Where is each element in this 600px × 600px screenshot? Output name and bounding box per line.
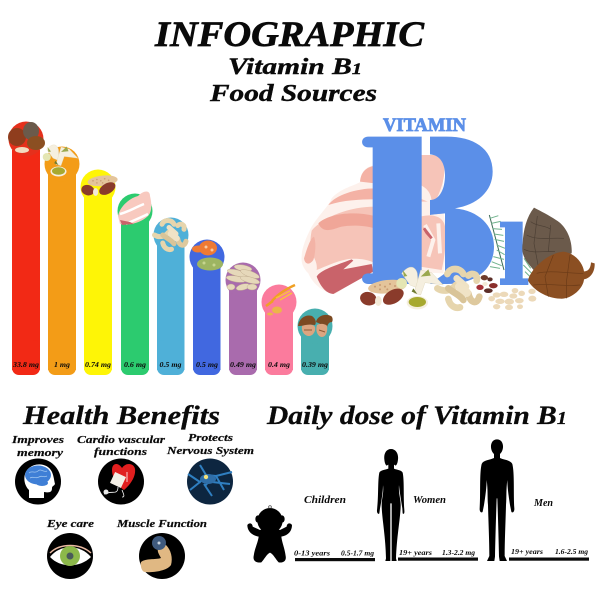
benefit: protects nervous system <box>166 432 255 504</box>
dose: women: 19+ years <box>399 549 432 557</box>
dose: women: Women <box>413 495 446 506</box>
pale seeds <box>488 288 536 310</box>
dose: men: 1.6-2.5 mg <box>555 548 589 556</box>
dose: women: 1.3-2.2 mg <box>442 549 476 557</box>
benefit: eye care: Eye care <box>46 518 94 530</box>
bar: 0.5 mg lentils <box>190 240 224 375</box>
bar: 0.4 mg <box>262 284 296 375</box>
bar: 0.74 mg: 0.74 mg <box>85 360 111 369</box>
subscript 1 <box>500 222 528 285</box>
benefit: cardio vascular functions: functions <box>94 446 147 458</box>
silhouette: man <box>480 439 514 561</box>
bar: 0.5 mg cashews: 0.5 mg <box>160 360 182 369</box>
heading: Health Benefits: Health Benefits <box>22 401 220 430</box>
bar: 0.74 mg <box>80 170 118 375</box>
letter B <box>362 137 494 284</box>
dose: men <box>480 439 589 561</box>
title <box>154 14 425 107</box>
bar: 1 mg: 1 mg <box>54 360 70 369</box>
bar: 33.8 mg: 33.8 mg <box>12 360 39 369</box>
dose: children: 0.5-1.7 mg <box>341 550 375 558</box>
bar: 0.6 mg: 0.6 mg <box>124 360 146 369</box>
dose: children: 0-13 years <box>294 550 330 558</box>
illustration: vitamin B1 with foods <box>302 137 595 310</box>
benefit: muscle function: Muscle Function <box>116 518 207 530</box>
bar: 0.39 mg: 0.39 mg <box>302 360 328 369</box>
title: INFOGRAPHIC <box>154 14 425 54</box>
meat <box>302 155 446 294</box>
benefit: protects nervous system: Protects <box>188 432 233 444</box>
title: Vitamin B 1 <box>228 54 362 79</box>
label: VITAMIN: VITAMIN <box>383 115 466 136</box>
title: Food Sources <box>209 81 377 107</box>
pistachios <box>396 267 443 309</box>
benefit: improves memory: memory <box>17 447 63 459</box>
benefit: eye care <box>46 518 94 579</box>
pine cone: brown <box>528 252 595 299</box>
bar: 0.49 mg <box>226 262 260 375</box>
dose: men: 19+ years <box>511 548 543 556</box>
bar: 0.4 mg: 0.4 mg <box>268 360 290 369</box>
heading: Daily dose of Vitamin B1: Daily dose of Vitamin B 1 <box>266 401 567 430</box>
dose: men: Men <box>533 498 553 509</box>
silhouette: baby <box>247 506 292 562</box>
benefit: cardio vascular functions <box>77 434 166 504</box>
bar chart: food sources <box>8 122 333 375</box>
bar: 0.39 mg <box>298 308 333 375</box>
bar: 1 mg <box>43 145 80 375</box>
peanuts <box>359 278 407 308</box>
bar: 0.5 mg lentils: 0.5 mg <box>196 360 218 369</box>
bar: 0.49 mg: 0.49 mg <box>230 360 256 369</box>
silhouette: woman <box>377 449 404 561</box>
benefit: cardio vascular functions: Cardio vascular <box>77 434 166 446</box>
benefit: improves memory <box>11 434 64 504</box>
pine cone: grey <box>522 208 572 272</box>
cashews <box>437 269 479 308</box>
benefit: protects nervous system: Nervous System <box>166 445 255 457</box>
benefit: improves memory: Improves <box>11 434 64 446</box>
dose: children <box>247 495 375 562</box>
dose: children: Children <box>304 495 346 506</box>
benefit: muscle function <box>116 518 207 579</box>
dose: women <box>377 449 478 561</box>
bar: 0.5 mg cashews <box>154 218 188 375</box>
bar: 0.6 mg <box>118 192 152 375</box>
bar: 33.8 mg <box>8 122 45 375</box>
fern leaves <box>489 215 532 277</box>
red beans <box>476 275 498 293</box>
